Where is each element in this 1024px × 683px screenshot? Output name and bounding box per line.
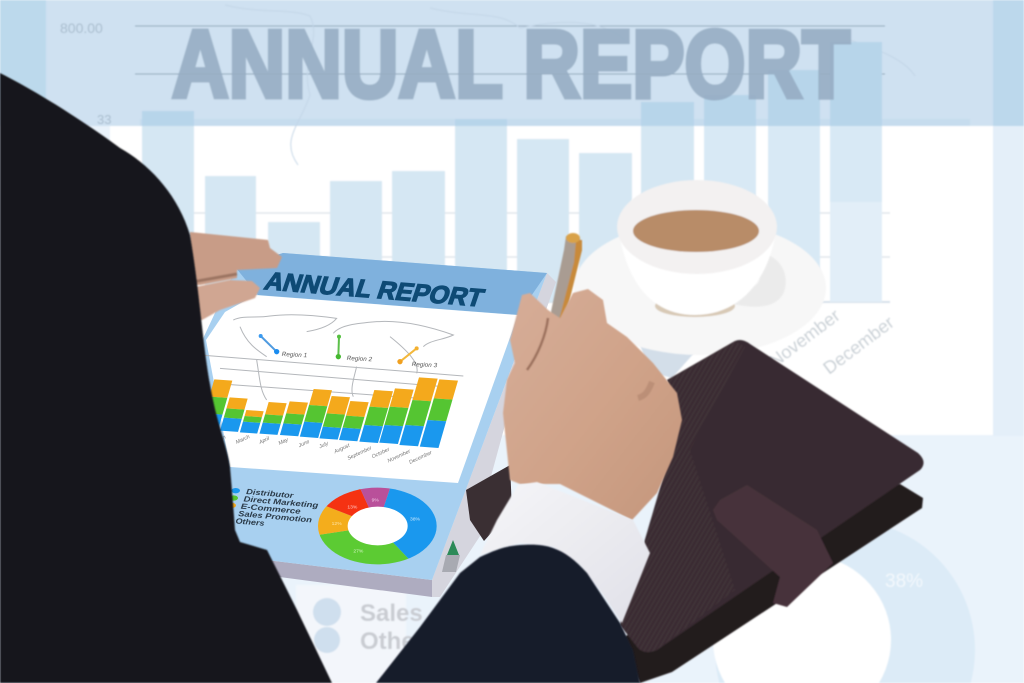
axis label: 33: 33: [97, 112, 111, 127]
saucer: [574, 221, 826, 355]
donut chart: 12%: [332, 521, 342, 527]
map outline: [200, 315, 463, 400]
axis month labels: [765, 305, 898, 378]
month labels: July: [317, 441, 330, 451]
month labels: June: [297, 439, 311, 450]
region 1 marker: Region 1: [282, 351, 307, 359]
background legend fragment: [296, 585, 437, 683]
axis label: 800.00: 800.00: [60, 20, 103, 36]
binder corner behind booklet: [466, 465, 512, 541]
month labels: Jan: [216, 434, 227, 444]
legend: Sales Promotion: [238, 509, 313, 524]
chart fragment under saucer: [640, 345, 695, 378]
region 3 marker: [397, 346, 438, 369]
binder woven texture: [620, 341, 745, 652]
white chart page: [206, 295, 518, 483]
shirt cuff: [480, 482, 650, 623]
legend: Others: [235, 516, 265, 528]
month labels: May: [278, 437, 290, 447]
region 2 marker: [336, 335, 373, 363]
background donut chart: [713, 520, 975, 683]
axis month labels: November: [765, 305, 844, 371]
month labels: November: [387, 449, 412, 464]
left hand fingers: [190, 232, 282, 320]
month labels: [216, 434, 433, 466]
title: ANNUAL REPORT: ANNUAL REPORT: [172, 11, 850, 118]
legend: Direct Marketing: [243, 494, 319, 510]
annual report booklet: [200, 253, 556, 607]
suit shoulder and arm: [0, 73, 332, 683]
legend: E-Commerce: [240, 502, 302, 516]
cup rim: [617, 180, 777, 274]
large chart bars: [142, 42, 882, 302]
world map watermark: [225, 5, 915, 165]
region 2 marker: Region 2: [347, 355, 373, 363]
month labels: August: [332, 442, 351, 456]
legend: [227, 487, 319, 528]
booklet title: ANNUAL REPORT: [261, 268, 488, 312]
pen: [548, 233, 582, 330]
cup shadow: [655, 295, 735, 317]
region 3 marker: Region 3: [412, 361, 438, 369]
month labels: September: [347, 445, 373, 462]
cover header band: [236, 253, 547, 315]
axis month labels: December: [819, 312, 898, 378]
background donut chart: 38%: [885, 571, 923, 592]
coffee: [633, 210, 759, 252]
stacked bar chart: [200, 377, 458, 448]
month labels: October: [371, 447, 391, 460]
binder back cover: [620, 484, 923, 683]
donut chart: [318, 488, 437, 564]
region 1 marker: [259, 334, 307, 359]
coffee cup and saucer: [574, 180, 826, 355]
donut chart: 13%: [347, 504, 358, 510]
booklet cover: [200, 253, 547, 580]
donut chart: 27%: [353, 549, 364, 555]
right sleeve: [376, 545, 640, 683]
cup body: [618, 225, 777, 315]
month labels: April: [257, 436, 271, 446]
donut chart: 9%: [372, 498, 379, 504]
booklet bottom page block: [225, 555, 432, 597]
legend: Distributor: [246, 487, 295, 500]
booklet side pages: [432, 273, 556, 597]
binder front cover: [620, 340, 924, 652]
month labels: March: [235, 434, 251, 446]
background legend fragment: Sales: [360, 600, 423, 627]
donut chart: 38%: [410, 517, 421, 523]
side page marks: [442, 540, 460, 572]
right hand: [503, 289, 682, 520]
binder clasp tab: [713, 485, 833, 607]
cup handle: [732, 252, 786, 307]
month labels: December: [408, 450, 433, 466]
background legend fragment: Others: [360, 628, 437, 655]
leather binder: [620, 340, 924, 683]
